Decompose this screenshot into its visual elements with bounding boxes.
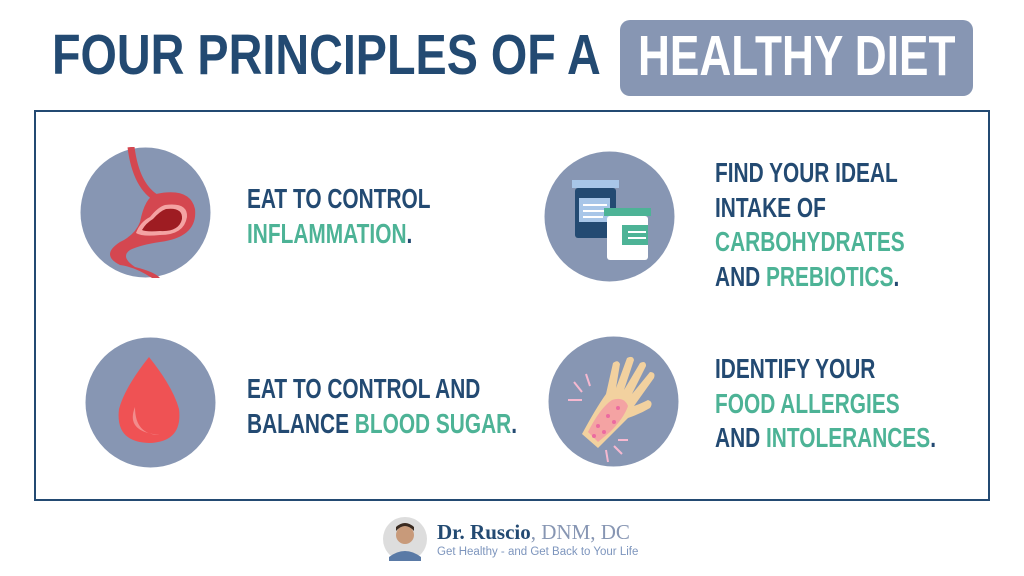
text: carbohydrates: AND PREBIOTICS. <box>715 260 899 292</box>
text: inflammation: INFLAMMATION. <box>247 218 412 248</box>
icon: containers <box>544 152 674 282</box>
text: blood sugar <box>247 373 517 438</box>
avatar <box>383 517 427 561</box>
title: FOUR PRINCIPLES OF A <box>52 23 601 87</box>
text: carbohydrates <box>715 157 905 292</box>
text: carbohydrates: FIND YOUR IDEAL <box>715 157 898 188</box>
text: food allergies: FOOD ALLERGIES <box>715 388 900 418</box>
title highlight pill: HEALTHY DIET <box>638 24 955 88</box>
footer: author <box>383 517 638 561</box>
text: food allergies: AND INTOLERANCES. <box>715 422 936 453</box>
text: inflammation <box>247 183 430 248</box>
text: blood sugar: EAT TO CONTROL AND <box>247 373 480 404</box>
name: Dr. Ruscio, DNM, DC <box>437 520 630 544</box>
icon: stomach <box>80 147 210 278</box>
icon: blood drop <box>86 338 216 468</box>
tagline: Get Healthy - and Get Back to Your Life <box>437 546 638 558</box>
text: inflammation: EAT TO CONTROL <box>247 183 430 214</box>
text: blood sugar: BALANCE BLOOD SUGAR. <box>247 408 517 438</box>
text: food allergies <box>715 353 936 453</box>
text: carbohydrates: INTAKE OF <box>715 192 826 222</box>
icon: hand rash <box>548 336 678 466</box>
text: carbohydrates: CARBOHYDRATES <box>715 226 905 257</box>
main panel <box>34 110 990 501</box>
text: food allergies: IDENTIFY YOUR <box>715 353 875 384</box>
